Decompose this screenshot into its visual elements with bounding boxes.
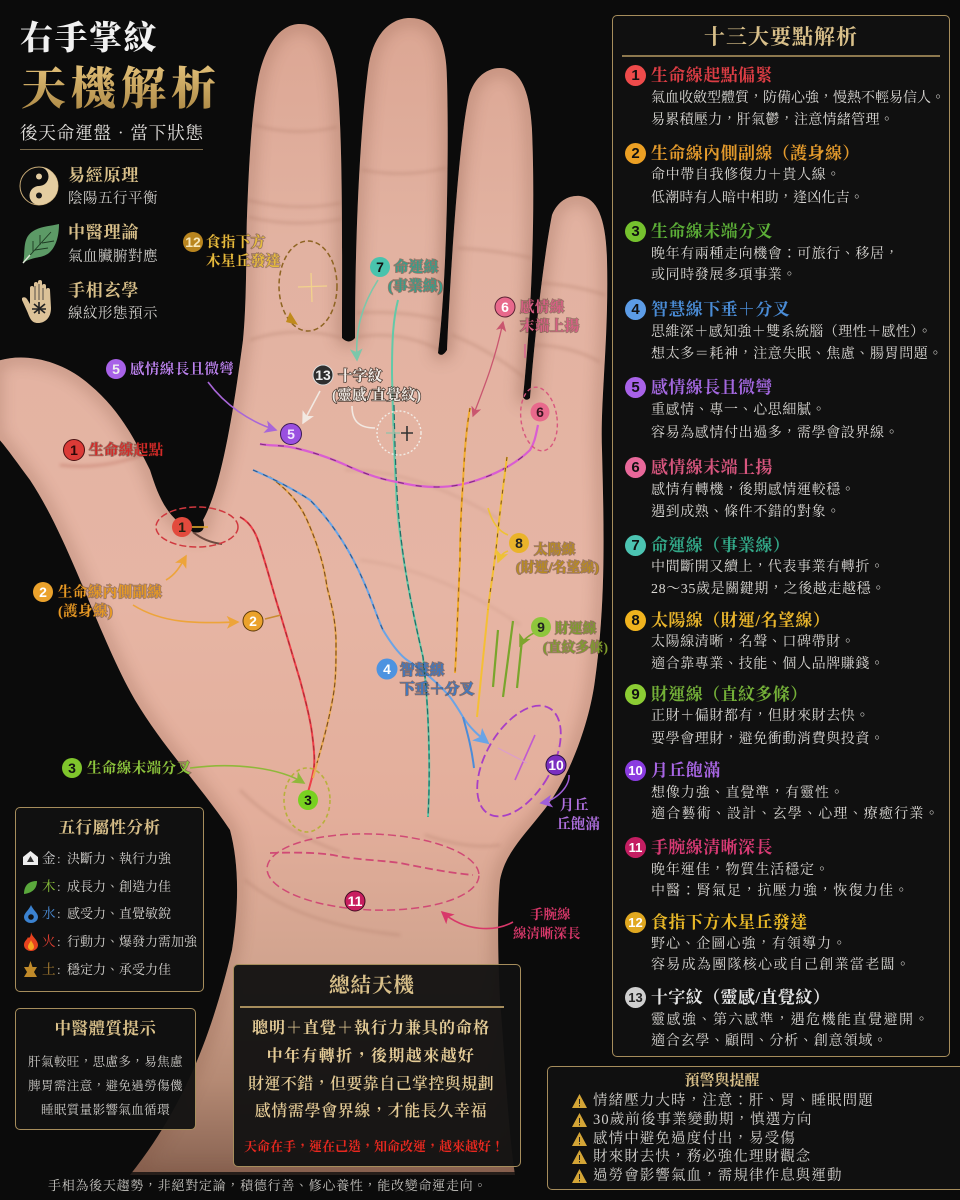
callout 4: wisdom line: 智慧線 [400,661,445,679]
callout 1: life line start [63,439,164,461]
row: metal: : [57,851,61,866]
title line one: 右手掌紋 [20,21,158,57]
item 8: 8 [631,612,640,629]
callout 13: intuition cross: 十字紋 [338,367,383,385]
item 1: 1 [631,67,640,84]
item 4 [625,299,943,362]
item 12: 容易成為團隊核心或自己創業當老闆。 [651,958,911,973]
callout 13: intuition cross: 13 [315,367,331,383]
row: wood: 成長力、創造力佳 [67,879,171,894]
item 1: 易累積壓力，肝氣鬱，注意情緒管理。 [651,113,894,128]
tcm text [16,1050,195,1122]
wrist line ellipse [266,830,480,914]
row: water [16,904,203,924]
callout 3: life line fork [62,758,192,778]
item 5: 重感情、專一、心思細膩。 [651,403,826,418]
item 10 [625,760,940,822]
badge 6 on palm: 6 [536,404,544,420]
callout 12: jupiter mount: 食指下方 [206,233,266,251]
row: earth [16,960,203,980]
footer note: 手相為後天趨勢，非絕對定論，積德行善、修心養性，能改變命運走向。 [48,1178,487,1193]
callout 4: wisdom line: 下垂＋分叉 [400,681,475,698]
summary heading: 總結天機 [329,975,415,997]
item 8 [625,610,885,672]
callout 10: moon mount: 丘飽滿 [556,815,600,833]
jupiter mount ellipse [279,241,337,331]
panel: five elements [15,807,204,992]
badge 2 on palm [242,610,264,632]
career line [392,300,429,817]
tcm text: 肝氣較旺，思慮多，易焦慮 [28,1055,183,1069]
intuition cross circle [377,411,421,455]
item 13: 十字紋（靈感/直覺紋） [651,988,830,1007]
warning 3: 感情中避免過度付出，易受傷 [593,1131,796,1147]
warning 1: 情緒壓力大時，注意：肝、胃、睡眠問題 [593,1093,874,1109]
callout 4: wisdom line [376,658,475,698]
item 3: 生命線末端分叉 [651,222,773,241]
callout 11: wrist line: 手腕線 [530,906,571,922]
icon: yin yang [20,166,58,206]
callout 6: heart line end [494,296,580,335]
summary text: 財運不錯，但要靠自己掌控與規劃 [248,1076,494,1093]
item 10: 10 [628,763,643,778]
callout 9: wealth line [531,617,608,656]
panel: summary [233,964,521,1167]
callout 6: heart line end: 末端上揚 [520,317,580,335]
icon: leaf [22,224,59,264]
callout 8: sun line [509,533,600,575]
footer note [0,1172,960,1200]
wisdom line [253,470,488,768]
item 2: 命中帶自我修復力＋貴人線。 [651,168,841,183]
badge 3 on palm [298,790,318,810]
life line start ellipse [156,507,238,547]
badge 3 on palm: 3 [304,792,312,808]
callout 6: heart line end: 6 [501,299,509,315]
tcm text: 睡眠質量影響氣血循環 [41,1103,170,1117]
callout 9: wealth line: (直紋多條) [543,639,608,655]
heart line end circle [517,385,561,453]
row: fire [16,932,203,952]
item 6 [625,457,855,520]
item 6: 感情有轉機，後期感情運較穩。 [651,483,855,498]
summary text [234,1015,520,1127]
callout 5: heart line [106,359,234,379]
text: yijing principle: 易經原理 [68,166,139,185]
summary text: 感情需學會界線，才能長久幸福 [255,1103,487,1120]
item 11: 晚年運佳，物質生活穩定。 [651,863,830,878]
item 9 [625,684,885,747]
warning 5 [572,1167,902,1186]
item 10: 適合藝術、設計、玄學、心理、療癒行業。 [651,807,940,822]
callout 11: wrist line [513,906,581,941]
item 12 [625,912,911,973]
item 11 [625,837,909,899]
callout 10: moon mount: 10 [548,757,564,773]
summary motto: 天命在手，運在己造，知命改運，越來越好！ [244,1139,504,1154]
item 11: 手腕線清晰深長 [651,838,773,857]
item 5: 感情線長且微彎 [651,378,773,397]
panel: tcm constitution [15,1008,196,1130]
row: wood [16,877,203,897]
callout 7: career line: 7 [376,259,384,275]
item 9: 正財＋偏財都有，但財來財去快。 [651,709,870,724]
callout 12: jupiter mount: 12 [185,234,201,250]
callout 9: wealth line: 9 [537,619,545,635]
item 12: 野心、企圖心強，有領導力。 [651,937,847,952]
item 11: 中醫：腎氣足，抗壓力強，恢復力佳。 [651,884,909,899]
callout 2: inner life line: 2 [39,584,47,600]
warning 2 [572,1111,902,1130]
callout 2: inner life line: 生命線內側副線 [58,583,162,601]
item 12: 食指下方木星丘發達 [651,913,808,932]
item 11: 11 [629,840,642,855]
row: wood: : [57,879,61,894]
item 6: 6 [631,459,640,476]
wealth lines [493,621,522,697]
panel heading: 十三大要點解析 [704,25,858,49]
item 7 [625,535,886,597]
callout 2: inner life line [33,582,162,620]
row: earth: 土 [42,962,56,977]
panel: warnings [547,1066,960,1190]
callout 12: jupiter mount: 木星丘發達 [206,252,281,270]
badge 1 on palm: 1 [178,519,186,535]
badge 11 on wrist: 11 [348,893,363,909]
summary text: 中年有轉折，後期越來越好 [267,1048,475,1065]
callout 12: jupiter mount [183,232,281,270]
item 9: 9 [631,686,640,703]
item 13: 13 [628,990,643,1005]
item 1 [625,65,945,128]
item 6: 感情線末端上揚 [651,458,773,477]
heart line [260,425,538,487]
item 8: 太陽線（財運/名望線） [651,611,830,630]
item 8: 適合靠專業、技能、個人品牌賺錢。 [651,657,885,672]
callout 6: heart line end: 感情線 [520,298,565,316]
summary text: 聰明＋直覺＋執行力兼具的命格 [252,1020,490,1037]
row: water: 感受力、直覺敏銳 [67,906,171,921]
callout 10: moon mount: 月丘 [560,797,589,814]
icon: palm [22,280,51,323]
warning 5: 過勞會影響氣血，需規律作息與運動 [593,1168,843,1184]
item 1: 氣血收斂型體質，防備心強，慢熱不輕易信人。 [651,91,945,106]
row: water: : [57,906,61,921]
panel: thirteen key points [612,15,950,1057]
callout 7: career line: (事業線) [388,277,443,295]
life line fork ellipse [284,768,330,832]
row: earth: 穩定力、承受力佳 [67,962,171,977]
item 6: 遇到成熟、條件不錯的對象。 [651,505,841,520]
item 13: 靈感強、第六感準，遇危機能直覺避開。 [651,1013,930,1028]
sun line two [477,457,507,717]
item 4: 思維深＋感知強＋雙系統腦（理性＋感性）。 [651,325,932,340]
row: earth: : [57,962,61,977]
callout 3: life line fork: 生命線末端分叉 [87,759,191,777]
warning 3 [572,1130,902,1149]
text: yijing principle: 陰陽五行平衡 [68,191,158,207]
item 3: 晚年有兩種走向機會：可旅行、移居， [651,247,899,262]
row: wood: 木 [42,879,56,894]
text: tcm theory: 中醫理論 [68,223,139,242]
text: palmistry: 手相玄學 [68,281,139,300]
five elements heading: 五行屬性分析 [58,818,160,837]
badge 5 on palm [280,423,302,445]
badge 2 on palm: 2 [249,613,257,629]
item 13 [625,987,930,1049]
item 7: 命運線（事業線） [651,536,790,555]
callout 2: inner life line: (護身線) [58,602,113,620]
item 9: 財運線（直紋多條） [651,685,808,704]
warnings heading: 預警與提醒 [684,1073,760,1089]
item 10: 月丘飽滿 [651,761,721,780]
item 2: 2 [631,145,640,162]
callout 7: career line: 命運線 [394,258,439,276]
badge 1 on palm [172,517,192,537]
item 3: 或同時發展多項事業。 [651,268,797,283]
callout 5: heart line: 5 [112,361,120,377]
callout 9: wealth line: 財運線 [555,620,597,636]
item 2 [625,143,864,206]
item 10: 想像力強、直覺準，有靈性。 [651,786,845,801]
text: yijing principle [68,166,158,207]
warning 2: 30歲前後事業變動期，慎選方向 [593,1112,812,1128]
callout 8: sun line: (財運/名望線) [516,559,599,575]
callout 8: sun line: 太陽線 [534,541,576,557]
warning 4: 財來財去快，務必強化理財觀念 [593,1149,811,1165]
subtitle: 後天命運盤．當下狀態 [20,123,204,143]
item 7: 7 [631,537,640,554]
item 1: 生命線起點偏緊 [651,66,773,85]
item 9: 要學會理財，避免衝動消費與投資。 [651,732,885,747]
item 2: 低潮時有人暗中相助，逢凶化吉。 [651,191,864,206]
title block [20,20,221,150]
item 4: 想太多＝耗神，注意失眠、焦慮、腸胃問題。 [651,347,943,362]
tcm text: 脾胃需注意，避免過勞傷僟 [28,1079,183,1093]
inner life line [270,477,336,778]
life line [240,517,314,792]
arrows [133,280,569,929]
row: fire: : [57,934,61,949]
text: palmistry [68,281,158,322]
callout 3: life line fork: 3 [68,760,76,776]
row: fire: 火 [42,934,56,949]
warning 4 [572,1148,902,1167]
item 7: 28～35歲是關鍵期，之後越走越穩。 [651,582,886,597]
callout 1: life line start: 1 [70,442,78,458]
row: metal: 金 [42,851,56,866]
tcm heading: 中醫體質提示 [54,1019,156,1038]
item 5: 容易為感情付出過多，需學會設界線。 [651,426,899,441]
hand photo illustration [0,18,608,1175]
item 4: 4 [631,301,640,318]
row: metal: 決斷力、執行力強 [67,851,171,866]
item 4: 智慧線下垂＋分叉 [651,300,790,319]
badge 6 on palm [530,402,550,422]
row: fire: 行動力、爆發力需加強 [67,934,197,949]
callout 13: intuition cross [312,364,422,404]
text: tcm theory [68,223,158,265]
item 5: 5 [631,379,640,396]
title line two: 天機解析 [21,64,221,114]
text: palmistry: 線紋形態預示 [68,306,158,322]
callout 7: career line [370,257,443,296]
callout 4: wisdom line: 4 [383,661,391,677]
callout 13: intuition cross: (靈感/直覺紋) [332,386,421,404]
item 7: 中間斷開又續上，代表事業有轉折。 [651,560,885,575]
callout 11: wrist line: 線清晰深長 [513,925,581,941]
callout 8: sun line: 8 [515,535,523,551]
item 5 [625,377,899,441]
item 12: 12 [628,915,643,930]
item 2: 生命線內側副線（護身線） [651,144,860,163]
callout 1: life line start: 生命線起點 [89,441,164,459]
item 3: 3 [631,223,640,240]
badge 5 on palm: 5 [287,426,295,442]
text: tcm theory: 氣血臟腑對應 [68,249,158,265]
row: water: 水 [42,906,56,921]
moon mount ellipse [460,692,578,830]
item 3 [625,221,899,283]
sun line one [455,408,470,673]
item 13: 適合玄學、顧問、分析、創意領域。 [651,1034,888,1049]
callout 10: moon mount [546,754,600,833]
callout 5: heart line: 感情線長且微彎 [130,360,234,378]
item 8: 太陽線清晰，名聲、口碑帶財。 [651,635,855,650]
badge 11 on wrist [344,890,366,912]
